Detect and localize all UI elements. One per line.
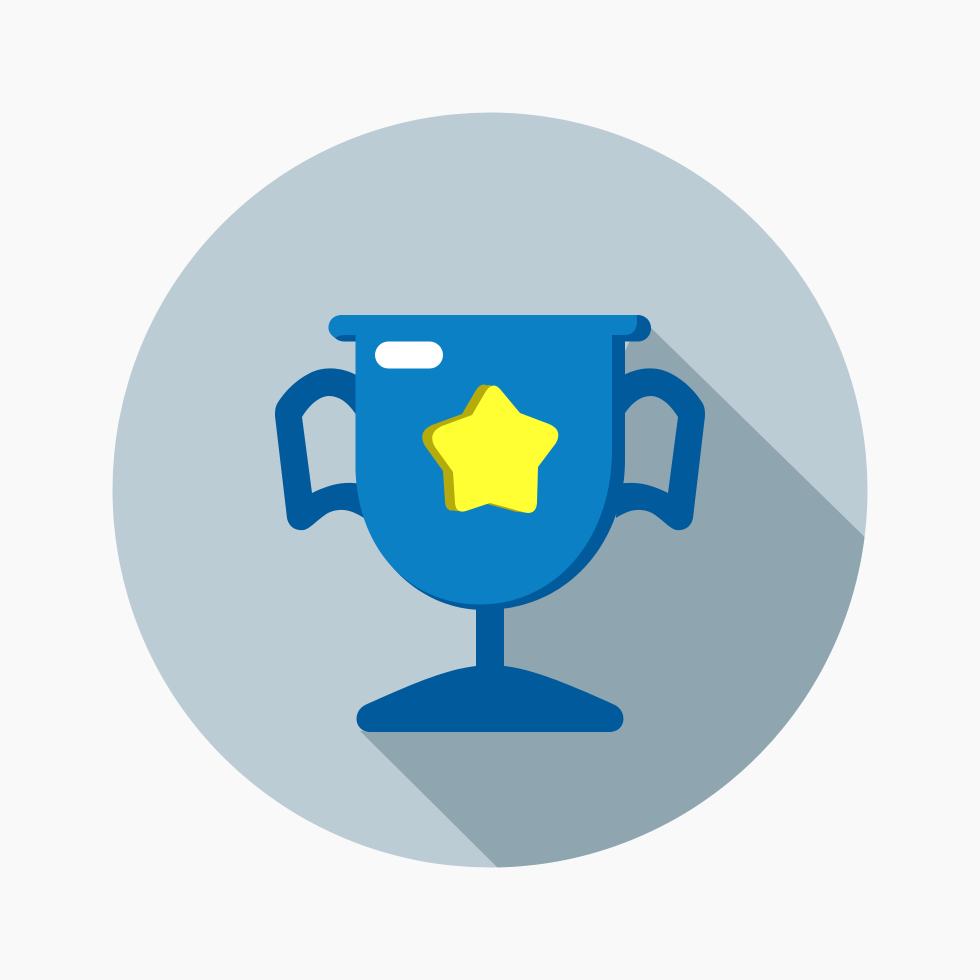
trophy icon infographic bbox=[112, 112, 868, 868]
right handle bbox=[616, 368, 705, 530]
stem and base bbox=[357, 600, 623, 732]
rim bbox=[328, 315, 637, 338]
highlight bbox=[375, 342, 443, 368]
cup shade bbox=[356, 330, 625, 610]
left handle bbox=[275, 368, 364, 530]
long shadow bbox=[360, 318, 880, 880]
trophy bbox=[275, 315, 705, 732]
star shade bbox=[422, 384, 548, 512]
background circle bbox=[112, 112, 868, 868]
star bbox=[432, 385, 558, 513]
star shade bridge bbox=[427, 385, 553, 512]
cup body bbox=[356, 330, 612, 604]
rim shade bbox=[331, 315, 651, 342]
